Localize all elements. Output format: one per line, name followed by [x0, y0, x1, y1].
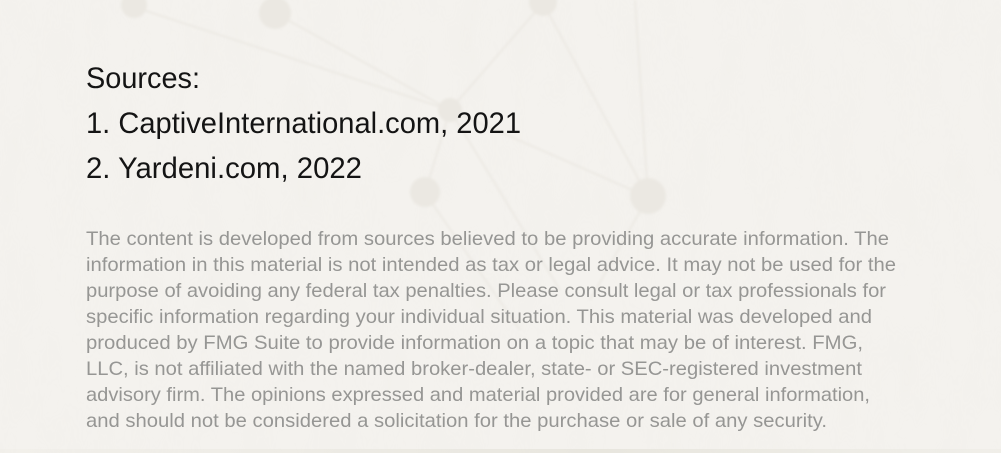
- background: faint network pattern: [121, 0, 666, 330]
- disclaimer text block: information in this material is not intended as tax or legal advice. It may not be used for the: [86, 254, 896, 276]
- source 1: 1. CaptiveInternational.com, 2021: [86, 107, 521, 140]
- disclaimer text block: advisory firm. The opinions expressed and material provided are for general information,: [86, 384, 870, 406]
- disclaimer text block: [86, 228, 896, 432]
- disclaimer text block: The content is developed from sources believed to be providing accurate information. The: [86, 228, 889, 250]
- source 2: 2. Yardeni.com, 2022: [86, 152, 362, 185]
- disclaimer text block: LLC, is not affiliated with the named broker-dealer, state- or SEC-registered investment: [86, 358, 863, 380]
- disclaimer text block: purpose of avoiding any federal tax penalties. Please consult legal or tax professionals for: [86, 280, 887, 302]
- sources heading: Sources:: [86, 62, 200, 95]
- sources list: [86, 62, 521, 185]
- disclaimer text block: specific information regarding your individual situation. This material was developed and: [86, 306, 872, 328]
- disclaimer text block: produced by FMG Suite to provide information on a topic that may be of interest. FMG,: [86, 332, 863, 354]
- disclaimer text block: and should not be considered a solicitation for the purchase or sale of any security.: [86, 410, 827, 432]
